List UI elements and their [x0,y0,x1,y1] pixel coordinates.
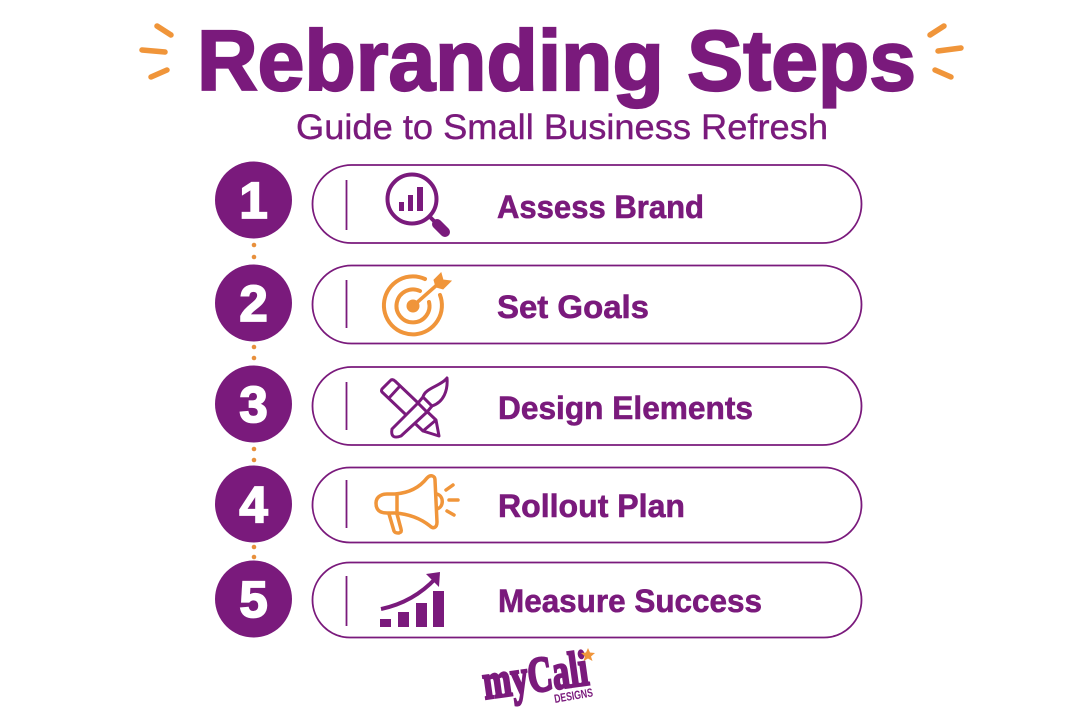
label 3: Design Elements [498,390,753,426]
icon: left sparkle [142,26,171,77]
title: Rebranding Steps [197,14,916,109]
logo: DESIGNS [553,685,594,706]
logo [479,640,595,710]
number badge 5: 5 [239,571,268,628]
label 2: Set Goals [497,289,649,325]
label 4: Rollout Plan [498,488,685,524]
icon: magnifier with bars [388,174,445,232]
icon: target with arrow [384,273,451,334]
row pill 2 [312,266,862,344]
row pill 5 [312,562,862,638]
row pill 4 [312,468,862,542]
number badge 4 [215,466,292,542]
number badge 3: 3 [239,376,268,433]
icon: megaphone [376,476,458,533]
icon: rising chart [380,572,444,627]
step 2 [215,264,862,344]
step 4 [215,466,862,542]
subtitle: Guide to Small Business Refresh [296,108,828,147]
number badge 3 [215,366,292,442]
step 3 [215,366,862,445]
row pill 3 [312,367,862,445]
step 5 [215,560,862,638]
row pill 1 [312,165,862,243]
number badge 5 [215,560,292,638]
number badge 1 [215,162,292,238]
connector dots [252,243,256,559]
icon: pencil and brush [382,378,447,437]
icon: right sparkle [930,26,961,77]
number badge 4: 4 [239,476,268,533]
number badge 2: 2 [239,275,268,332]
step 1 [215,162,862,243]
number badge 1: 1 [239,172,268,229]
number badge 2 [215,264,292,342]
label 1: Assess Brand [497,189,704,225]
label 5: Measure Success [498,583,762,619]
logo: myCali [479,640,592,710]
